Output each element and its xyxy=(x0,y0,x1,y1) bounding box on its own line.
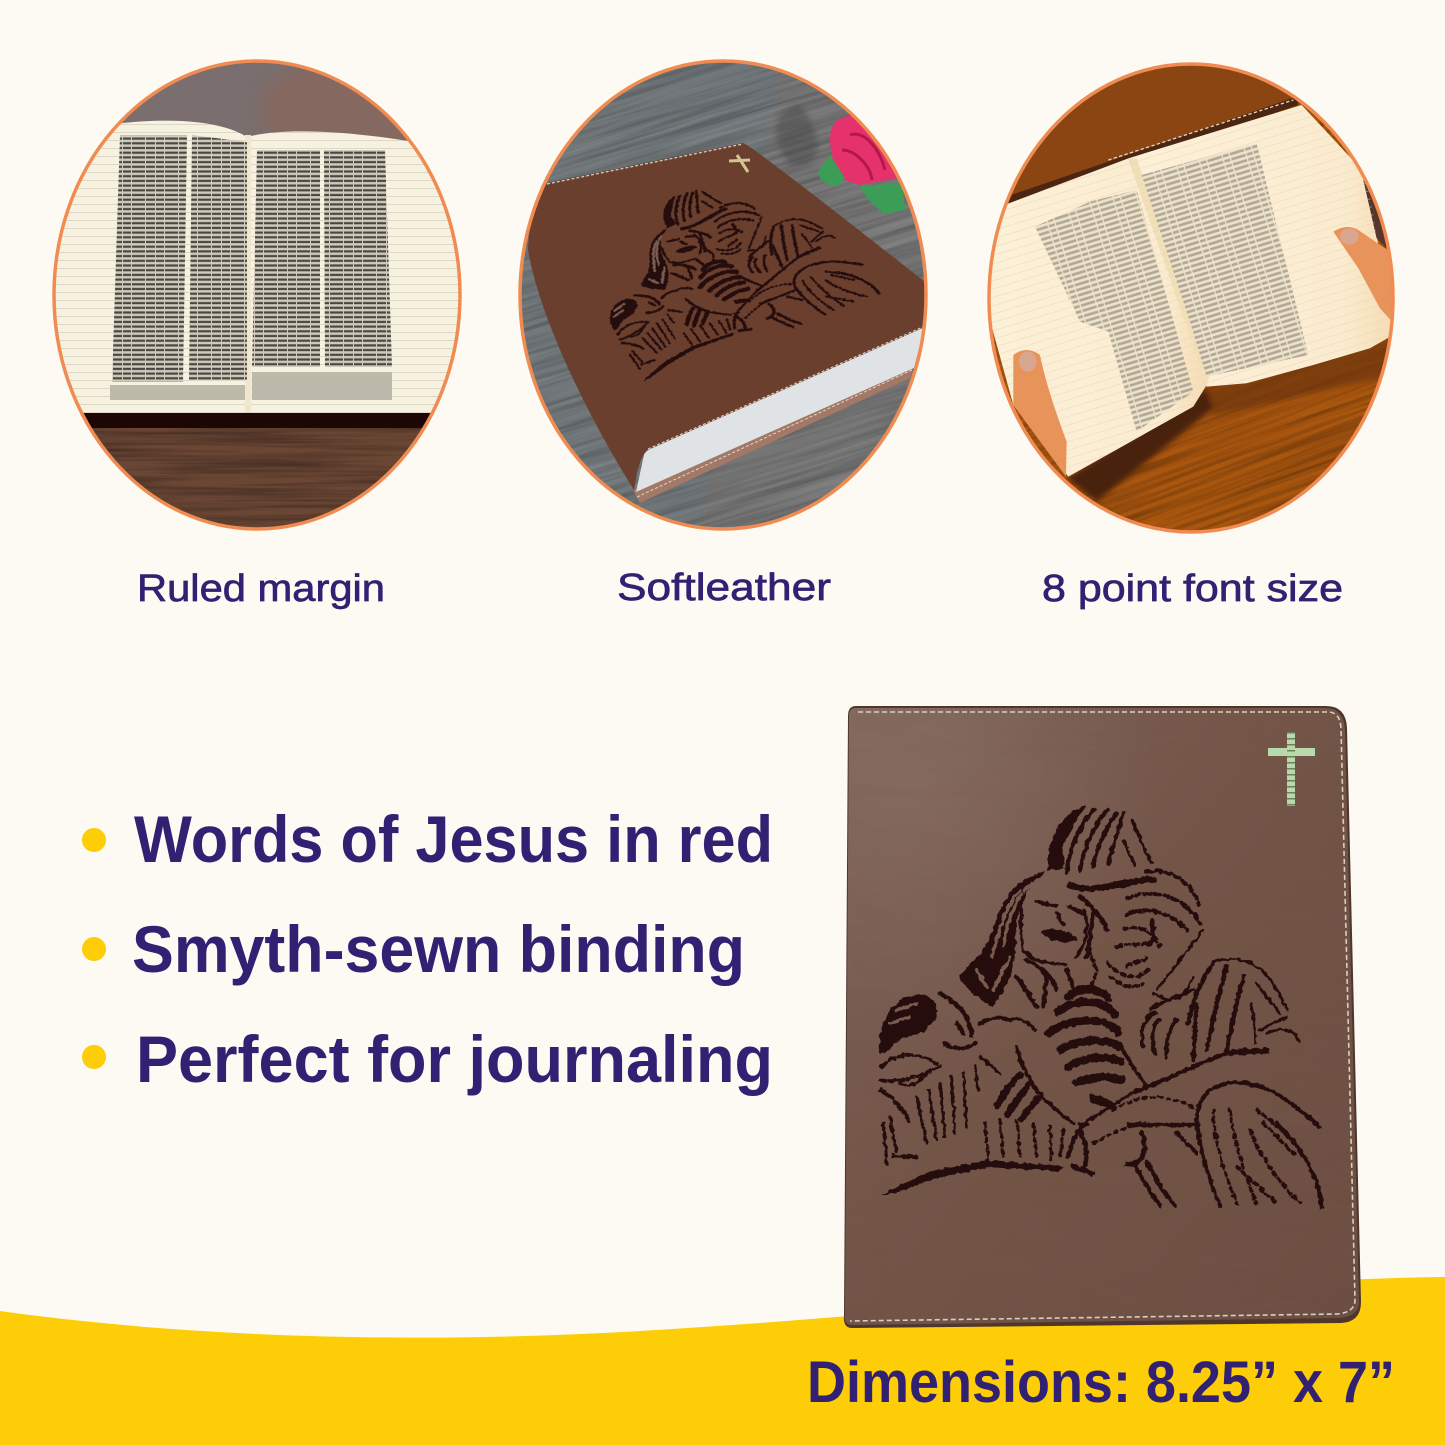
bullet text 1: Words of Jesus in red xyxy=(134,802,773,876)
photo border: hands xyxy=(989,64,1393,532)
photo border: ruled margin xyxy=(54,61,460,529)
bullet dot 2 xyxy=(82,937,106,961)
small engraved portrait xyxy=(609,189,882,382)
leather cover product xyxy=(844,705,1365,1330)
small cross xyxy=(729,155,750,172)
bullet text 3: Perfect for journaling xyxy=(136,1022,773,1096)
text blocks xyxy=(1035,190,1193,432)
photo: hands holding bible xyxy=(990,66,1392,530)
yellow footer wave xyxy=(0,1277,1445,1445)
cover body xyxy=(845,708,1359,1325)
book page edge xyxy=(636,326,925,492)
dimensions label: Dimensions: 8.25” x 7” xyxy=(807,1350,1395,1415)
caption: font size: 8 point font size xyxy=(1042,568,1343,610)
bullet dot 3 xyxy=(82,1045,106,1069)
right page xyxy=(1128,105,1393,387)
caption: ruled margin: Ruled margin xyxy=(137,568,385,610)
rose xyxy=(830,116,898,185)
hands xyxy=(1013,350,1067,477)
bullet list xyxy=(82,802,773,1096)
book back cover strip xyxy=(633,362,914,503)
cross emblem xyxy=(1268,732,1315,806)
bullet dot 1 xyxy=(82,828,106,852)
bullet text 2: Smyth-sewn binding xyxy=(132,912,745,986)
photo: ruled margin bible pages xyxy=(50,58,470,533)
photo: softleather cover xyxy=(522,62,924,528)
cover shadow edge xyxy=(844,706,1361,1328)
cover stitching xyxy=(850,712,1355,1321)
engraved family portrait xyxy=(880,806,1322,1207)
book cover top xyxy=(528,143,925,490)
photo border: softleather xyxy=(520,61,926,529)
left page xyxy=(987,158,1207,477)
caption: softleather: Softleather xyxy=(617,567,831,609)
